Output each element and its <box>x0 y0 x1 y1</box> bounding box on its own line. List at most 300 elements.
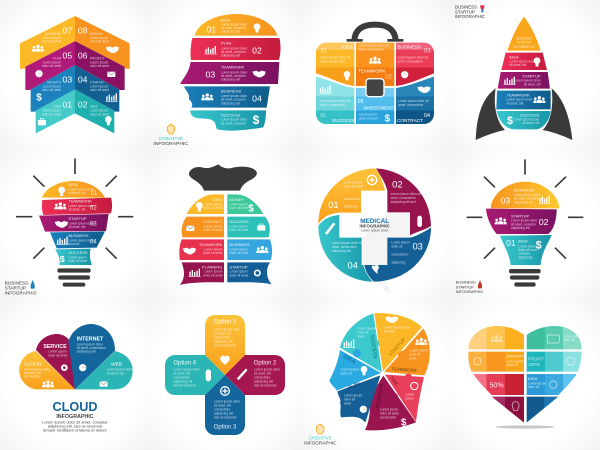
arm: option 1: sed do eiusmod <box>214 344 237 348</box>
band: idea: 01 <box>207 24 216 34</box>
puzzle: gold startup: STARTUP <box>388 337 408 358</box>
case section: business: amet, consectetur <box>398 60 423 64</box>
puzzle: navy plan: dolor sit <box>344 398 355 402</box>
heart: idea: Lorem ipsum <box>528 381 547 385</box>
heart: idea: dolor sit <box>528 385 539 389</box>
petal: web: WEB <box>111 362 123 368</box>
band 01: Lorem ipsum <box>518 244 537 248</box>
section 04: Lorem ipsum dolor sit <box>332 241 362 245</box>
puzzle: crimson money: dolor sit amet <box>380 412 399 416</box>
section: planning: Lorem ipsum <box>204 270 223 274</box>
puzzle: orange teamwork: dolor sit <box>409 352 421 356</box>
bulb base <box>509 269 541 287</box>
case section: success: 06 <box>320 113 326 119</box>
section 02 <box>376 168 431 235</box>
case section: contract: amet, consectetur <box>398 103 423 107</box>
band: business: 04 <box>90 239 97 245</box>
case section: business <box>396 43 434 86</box>
band: business: adipiscing elit <box>221 101 240 105</box>
section 03: 03 <box>412 241 423 251</box>
band: plan <box>191 38 281 60</box>
section: money <box>227 194 263 214</box>
puzzle: crimson money: Lorem ipsum <box>380 408 399 412</box>
section: contact: CONTACT <box>203 219 223 224</box>
section 03 <box>364 227 431 282</box>
panel: head infographic <box>153 14 281 147</box>
rocket section: idea <box>501 53 547 70</box>
section: money: dolor sit amet <box>229 206 248 210</box>
chevron 03 04: GROWTH <box>47 80 62 84</box>
puzzle: navy plan: Lorem ipsum <box>344 394 363 398</box>
band: success: SUCCESS <box>68 250 88 255</box>
chevron 07 08: 07 <box>63 26 72 36</box>
rocket section: idea: Lorem ipsum dolor <box>509 59 535 63</box>
chevron 05 06: 06 <box>78 51 88 61</box>
band: success: sit amet, consetur <box>221 121 246 125</box>
chevron 01 02: IDEA <box>54 104 62 108</box>
puzzle: red time <box>385 374 424 422</box>
puzzle: crimson money: consectetur <box>380 416 396 420</box>
cloud title: adipiscing elit, sed do eiusmod <box>48 424 102 429</box>
band: success: $ <box>253 113 260 127</box>
section: idea <box>187 194 224 214</box>
puzzle: teal success: SUCCESS <box>369 334 378 360</box>
arm: option 3: sed do eiusmod <box>214 416 237 420</box>
chevron 01 02 <box>36 89 114 133</box>
rocket section: success: $ <box>507 115 513 127</box>
arm: option 4: consectetur <box>173 376 190 380</box>
rocket section: teamwork <box>496 91 551 109</box>
chevron 03 04: dolor sit amet <box>90 88 109 92</box>
chevron 03 04 <box>31 65 119 112</box>
rocket section: teamwork: sit amet, elit <box>506 101 523 105</box>
chevron 05 06: dolor sit amet <box>90 64 109 68</box>
petal: internet: adipiscing elit <box>77 350 96 354</box>
arm: option 4 <box>165 355 225 395</box>
band 03: 03 <box>501 195 510 205</box>
chevron 05 06: dolor sit amet <box>42 64 61 68</box>
cloud title: Lorem ipsum dolor sit amet, consetur <box>42 420 108 425</box>
case section: investments <box>356 88 396 124</box>
band: success <box>190 110 266 131</box>
case section: success: amet, consectetur <box>320 103 345 107</box>
puzzle: red time: Lorem <box>405 392 415 396</box>
petal: internet <box>68 324 115 389</box>
chevron 01 02: Lorem ipsum <box>90 109 109 113</box>
petal: service: dolor sit amet <box>48 353 67 357</box>
logo: business startup: INFOGRAPHIC <box>5 290 38 295</box>
section 04 <box>318 215 373 282</box>
band 01: adipiscing <box>518 255 533 259</box>
section 03: consectetur <box>391 252 408 256</box>
band: plan: sit amet, consetur <box>221 50 246 54</box>
band: business: Lorem ipsum dolor <box>68 238 94 242</box>
arm: option 3: consectetur <box>214 408 230 412</box>
case section: success: Lorem ipsum dolor sit <box>320 99 350 103</box>
petal: web: Lorem ipsum dolor <box>107 368 133 372</box>
section: success: SUCCESS <box>229 219 249 224</box>
rocket tip: INFOGRAPHIC <box>513 45 536 49</box>
band 03: adipiscing elit <box>514 200 533 204</box>
rocket section: success: SUCCESS <box>520 112 540 117</box>
panel: puzzle head infographic <box>304 313 430 445</box>
case section: business: BUSINESS <box>397 45 421 50</box>
band: startup: Lorem ipsum dolor <box>68 221 94 225</box>
petal: internet: INTERNET <box>77 336 104 342</box>
section: success: Lorem ipsum <box>229 224 248 228</box>
section: money: Lorem ipsum <box>229 202 248 206</box>
heart shadow <box>496 425 554 429</box>
band: business: sit amet <box>68 242 80 246</box>
section: contact: Lorem ipsum <box>204 224 223 228</box>
arm: option 4: adipiscing elit <box>173 380 192 384</box>
panel: option cross infographic <box>165 315 285 435</box>
chevron 05 06: PROJECT <box>90 56 105 60</box>
logo: business startup <box>455 5 485 19</box>
band: idea: Lorem ipsum dolor <box>68 187 94 191</box>
band 01: dolor sit amet <box>518 248 537 252</box>
section: planning <box>180 262 224 285</box>
band: idea: IDEA <box>221 17 231 22</box>
chevron 01 02: 01 <box>63 99 72 109</box>
chevron 03 04: 03 <box>63 75 72 85</box>
band: teamwork: sit amet, consetur <box>221 74 246 78</box>
puzzle: gold startup: sit amet <box>384 330 395 334</box>
section: business: Lorem ipsum <box>229 247 248 251</box>
logo: creative infographic: INFOGRAPHIC <box>304 440 337 445</box>
logo: business startup: BUSINESS <box>456 280 476 285</box>
section 01: dolor sit amet <box>344 184 363 188</box>
logo: business startup: BUSINESS <box>455 5 477 10</box>
chevron 07 08: BUSINESS <box>45 32 61 36</box>
case section: success: SUCCESS <box>332 118 355 123</box>
band 03: Lorem ipsum dolor <box>514 193 540 197</box>
heart: bottom right <box>527 397 558 423</box>
arm: option 3 <box>205 375 245 435</box>
band 03: sit amet, consetur <box>514 197 539 201</box>
puzzle: navy plan <box>337 375 380 423</box>
logo: creative infographic <box>153 124 188 147</box>
petal: internet: sit amet, consectetur <box>77 346 106 350</box>
panel: heart infographic <box>468 326 582 429</box>
rocket section: startup: sit amet, elit <box>524 82 541 86</box>
cloud title <box>42 400 108 433</box>
puzzle: teal success <box>340 313 384 372</box>
chevron 05 06 <box>25 41 125 90</box>
heart: profit <box>527 352 582 372</box>
band 03 <box>491 182 559 208</box>
band 01: $ <box>536 240 542 252</box>
band: business: BUSINESS <box>221 89 241 94</box>
heart: energy <box>468 352 525 372</box>
petal: internet: Lorem ipsum dolor <box>77 342 103 346</box>
center title: Lorem ipsum dolor <box>361 228 389 232</box>
band: teamwork: 02 <box>90 205 97 211</box>
heart: top right: dolor sit <box>563 338 575 342</box>
band: plan: 02 <box>252 45 262 55</box>
arm: option 1: Option 1 <box>214 320 237 326</box>
case section: business: Lorem ipsum dolor sit <box>398 56 428 60</box>
puzzle: crimson money <box>365 376 416 430</box>
clasp <box>366 79 384 97</box>
band: business <box>184 86 270 108</box>
rocket section: success <box>497 111 551 129</box>
heart: fifty percent: 50% <box>490 382 504 389</box>
petal: cloud: consectetur <box>24 375 40 379</box>
handle <box>347 25 403 42</box>
rocket section: idea: IDEA <box>509 54 519 59</box>
section 02: amet, consectetur <box>391 196 416 200</box>
band: teamwork: Lorem ipsum dolor <box>68 204 94 208</box>
chevron 07 08: Lorem ipsum <box>90 36 109 40</box>
arm: option 2: adipiscing elit <box>254 380 273 384</box>
chevron 03 04: dolor sit amet <box>42 88 61 92</box>
section 04: adipiscing elit <box>332 249 351 253</box>
arm: option 4: Option 4 <box>173 361 197 367</box>
band: idea: sit amet, consetur <box>221 26 246 30</box>
puzzle: navy plan: PLAN <box>347 381 362 391</box>
band 02: STARTUP <box>511 213 530 218</box>
band: idea: Lorem ipsum dolor <box>221 22 247 26</box>
case section: investments: dolor sit amet <box>359 116 378 120</box>
case section: investments: Lorem ipsum <box>359 112 377 116</box>
panel: briefcase infographic <box>316 25 434 124</box>
case section: idea: Lorem ipsum dolor sit <box>320 56 350 60</box>
logo: creative infographic: INFOGRAPHIC <box>153 141 188 147</box>
band: idea: sit amet, elit <box>68 191 85 195</box>
logo: business startup: INFOGRAPHIC <box>455 14 485 19</box>
band 01: consetur <box>518 252 530 256</box>
section 01: 01 <box>328 200 339 210</box>
heart: top right: Lorem ipsum <box>563 334 582 338</box>
chevron 07 08: dolor sit amet <box>42 40 61 44</box>
band: business: BUSINESS <box>68 233 89 238</box>
center title: MEDICAL <box>360 218 389 225</box>
case section: teamwork: Lorem ipsum dolor sit <box>359 44 389 48</box>
bulb base <box>57 268 91 287</box>
rocket tip <box>507 17 541 51</box>
petal: web <box>75 351 133 389</box>
heart: top left <box>468 326 524 349</box>
bag knot <box>189 164 257 191</box>
section: teamwork: TEAMWORK <box>199 242 223 247</box>
section: success: dolor sit amet <box>229 228 248 232</box>
section: idea: dolor sit amet <box>203 206 222 210</box>
case section: idea: 01 <box>321 48 328 54</box>
puzzle: sky idea: IDEA <box>342 354 356 366</box>
chevron 05 06: Lorem ipsum <box>43 60 61 64</box>
band 01 <box>500 235 552 265</box>
band: teamwork: Lorem ipsum dolor <box>221 70 247 74</box>
heart: energy: dolor sit <box>507 363 518 367</box>
case section: contract: 04 <box>424 113 430 119</box>
section: contact: dolor sit amet <box>203 228 222 232</box>
section 02: adipiscing elit sed <box>391 200 416 204</box>
arm: option 1: Lorem ipsum dolor <box>214 328 240 332</box>
chevron 01 02: dolor sit amet <box>90 112 109 116</box>
puzzle: teal success: amet <box>357 334 364 338</box>
puzzle: navy plan: amet <box>344 402 351 406</box>
rocket section: startup <box>498 72 550 89</box>
arm: option 4: sit amet, elit <box>173 372 190 376</box>
arm: option 2 <box>225 355 285 395</box>
section 04: amet, consectetur <box>332 245 357 249</box>
case section: teamwork: amet, consectetur <box>359 48 384 52</box>
band 01: IDEA <box>518 239 528 244</box>
band: success: SUCCESS <box>221 112 241 117</box>
section: success <box>227 217 270 237</box>
chevron 05 06: Lorem ipsum <box>90 60 109 64</box>
chevron 01 02: dolor sit amet <box>42 112 61 116</box>
puzzle: orange teamwork: Lorem ipsum <box>409 348 428 352</box>
band 02: 02 <box>539 217 549 227</box>
rocket section: startup: STARTUP <box>522 73 541 78</box>
cloud title: INFOGRAPHIC <box>56 414 94 420</box>
arm: option 3: Option 3 <box>214 425 237 431</box>
chevron 05 06: PLAN <box>53 56 62 60</box>
chevron 07 08: Lorem ipsum <box>43 36 61 40</box>
section: idea: IDEA <box>213 197 223 202</box>
panel: cloud infographic <box>19 324 133 433</box>
chevron 03 04: Lorem ipsum <box>43 84 61 88</box>
section: teamwork: dolor sit amet <box>203 251 222 255</box>
section: contact <box>182 217 224 237</box>
rocket section: idea: sit amet, elit <box>509 63 526 67</box>
band: teamwork <box>180 62 279 84</box>
band: business <box>50 231 105 248</box>
section 01 <box>318 168 385 224</box>
section: planning: dolor sit amet <box>203 273 222 277</box>
cloud title: tempor incididunt ut labore et dolore <box>43 428 108 433</box>
puzzle: sky idea: dolor sit <box>341 372 352 376</box>
cloud title: CLOUD <box>52 400 97 414</box>
band 02: sit amet, consetur <box>511 222 536 226</box>
light rays <box>467 159 583 259</box>
puzzle: sky idea <box>329 349 381 391</box>
case section: investments: INVESTMENTS <box>363 105 396 110</box>
puzzle: crimson money: BUSINESS <box>374 383 384 410</box>
puzzle: orange teamwork <box>384 328 430 375</box>
puzzle: red time: TIME <box>389 375 399 387</box>
rocket section: teamwork: TEAMWORK <box>506 93 530 98</box>
band: teamwork <box>42 198 112 215</box>
puzzle: sky idea: Lorem ipsum <box>341 368 359 372</box>
section: business: dolor sit amet <box>229 251 248 255</box>
section: teamwork: Lorem ipsum <box>204 247 223 251</box>
rocket fins <box>476 88 572 140</box>
arm: option 1 <box>205 315 245 375</box>
band: idea: 01 <box>91 191 98 197</box>
section 01: consectetur <box>344 197 360 201</box>
chevron 03 04: Lorem ipsum <box>90 84 109 88</box>
logo: creative infographic <box>304 424 337 445</box>
case section: teamwork: TEAMWORK <box>358 69 386 74</box>
heart: energy: Lorem ipsum <box>507 359 525 363</box>
section 03: adipiscing <box>391 260 406 264</box>
band 02: Lorem ipsum dolor <box>511 219 537 223</box>
section 04: 04 <box>347 261 358 271</box>
case section: contract: Lorem ipsum dolor sit <box>398 99 429 103</box>
petal: cloud: Lorem ipsum dolor <box>24 367 50 371</box>
section 02: 02 <box>392 179 403 189</box>
cross long shadow <box>363 213 410 293</box>
case section: contract: CONTRACT <box>397 118 423 123</box>
logo: business startup: STARTUP <box>5 285 26 290</box>
band: teamwork: TEAMWORK <box>68 199 92 204</box>
chevron 03 04: 04 <box>78 75 88 85</box>
puzzle: gold startup <box>374 313 422 371</box>
case section: contract <box>396 77 434 124</box>
band: plan: adipiscing elit <box>221 54 240 58</box>
puzzle: orange teamwork: TEAMWORK <box>391 366 417 373</box>
band: success: $ <box>60 254 65 264</box>
puzzle: red time: ipsum <box>405 396 414 400</box>
band: startup: 03 <box>90 221 97 227</box>
arm: option 4: Lorem ipsum dolor <box>173 368 199 372</box>
chevron 03 04: $ <box>36 92 42 103</box>
band 02 <box>486 209 557 234</box>
band: teamwork: sit amet, elit <box>68 208 85 212</box>
section: startup: STARTUP <box>229 264 248 269</box>
puzzle: teal success: dolor sit <box>357 330 369 334</box>
case section: business: 03 <box>424 49 431 55</box>
heart: idea <box>527 374 577 395</box>
arm: option 2: consectetur <box>254 376 270 380</box>
arm: option 3: Lorem ipsum dolor <box>214 400 240 404</box>
section: teamwork <box>179 239 224 260</box>
section: business: BUSINESS <box>229 242 250 247</box>
case section: idea: IDEA <box>342 45 354 50</box>
band 03: BUSINESS <box>514 188 534 193</box>
petal: service: Lorem ipsum <box>48 350 67 354</box>
heart: idea: IDEA <box>528 376 538 381</box>
section 02: Lorem ipsum dolor sit <box>391 192 421 196</box>
logo: business startup: STARTUP <box>455 9 475 14</box>
section: money: MONEY <box>229 197 244 202</box>
petal: web: sit amet, elit <box>107 371 124 375</box>
arm: option 4: sed do eiusmod <box>173 384 196 388</box>
chevron 07 08: 08 <box>78 26 88 36</box>
logo: business startup: BUSINESS <box>5 281 28 286</box>
case section: teamwork: 02 <box>385 75 392 81</box>
section: startup <box>227 262 272 284</box>
center title: INFOGRAPHIC <box>360 224 390 229</box>
case section: investments: 05 <box>358 99 364 105</box>
logo: creative infographic: CREATIVE <box>159 136 184 142</box>
band: business: Lorem ipsum dolor <box>221 94 247 98</box>
arm: option 3: sit amet, elit <box>214 404 231 408</box>
logo: business startup: STARTUP <box>456 284 474 289</box>
case section: teamwork <box>356 43 394 86</box>
arm: option 2: sit amet, elit <box>254 372 271 376</box>
section: business <box>227 239 272 260</box>
chevron 01 02: IDEA <box>90 104 98 108</box>
rocket section: success: Lorem ipsum dolor <box>513 117 539 121</box>
band: success: Lorem ipsum dolor <box>221 118 247 122</box>
petal: service <box>36 334 75 389</box>
logo: business startup: INFOGRAPHIC <box>456 289 483 294</box>
chevron 07 08: DESIGN <box>90 32 103 36</box>
case section: idea <box>316 43 354 86</box>
petal: cloud: sit amet, elit <box>24 371 41 375</box>
band: plan: PLAN <box>221 41 232 46</box>
arm: option 2: sed do eiusmod <box>254 384 277 388</box>
arm: option 1: sit amet, elit <box>214 332 231 336</box>
band: success <box>55 249 92 265</box>
arm: option 1: adipiscing elit <box>214 340 233 344</box>
band: idea <box>195 14 277 36</box>
section 03: dolor sit <box>391 244 403 248</box>
